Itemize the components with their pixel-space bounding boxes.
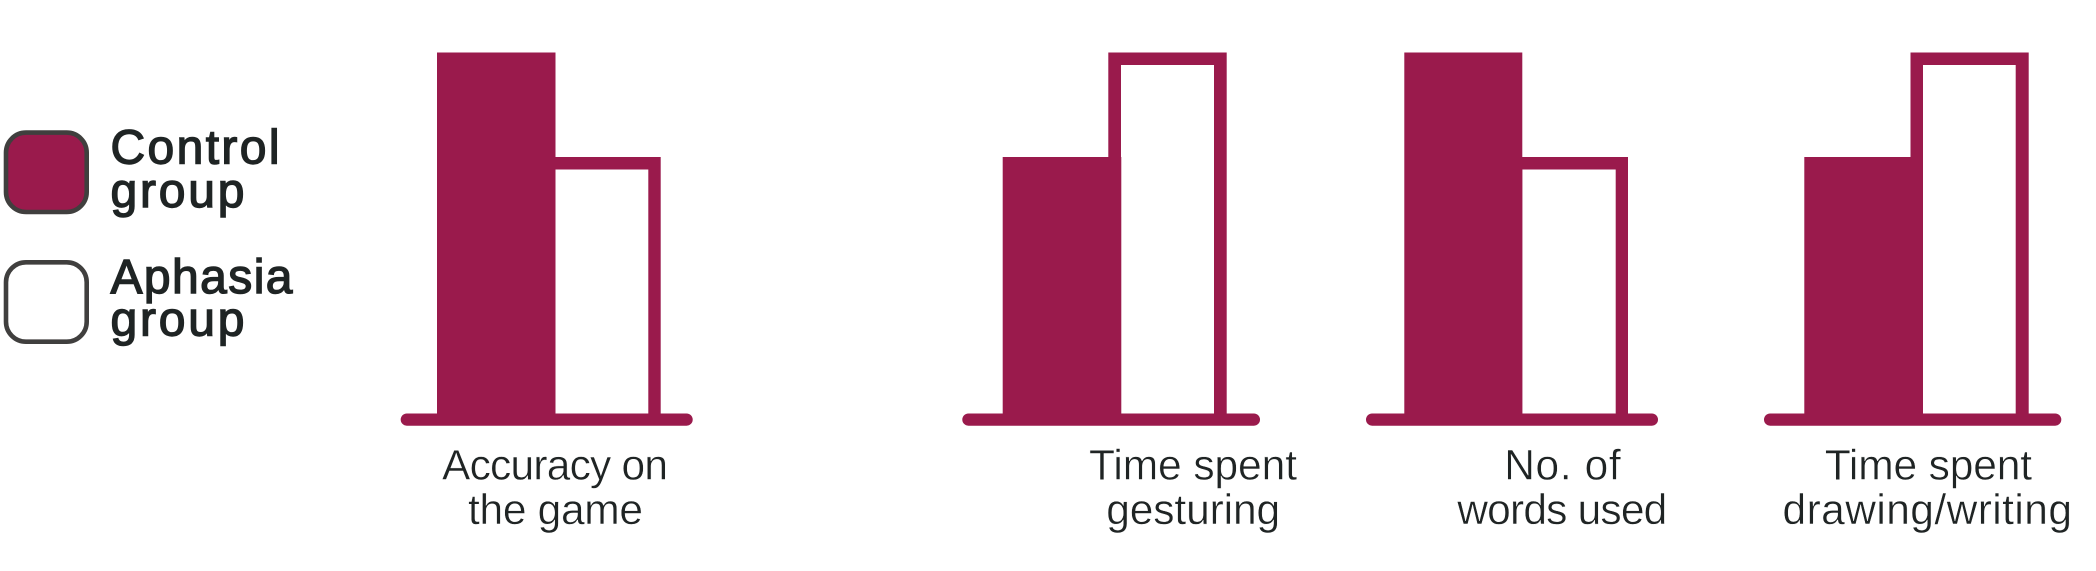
- aphasia bar outline: [1910, 52, 2029, 418]
- chart: time spent gesturing: [962, 52, 1297, 534]
- label: Time spent: [1089, 442, 1297, 489]
- baseline: [1366, 414, 1658, 426]
- chart: time spent drawing/writing: [1764, 52, 2072, 534]
- baseline: [1764, 414, 2061, 426]
- label: words used: [1456, 487, 1667, 534]
- legend swatch: control group: [6, 133, 87, 212]
- chart: number of words used: [1366, 52, 1667, 534]
- label: the game: [468, 487, 643, 534]
- legend: [6, 122, 293, 346]
- control bar: [1804, 157, 1923, 417]
- label: No. of: [1504, 442, 1621, 489]
- label: Accuracy on: [442, 442, 668, 489]
- label: gesturing: [1106, 487, 1280, 534]
- control bar: [437, 52, 556, 418]
- legend label: control group: Control: [110, 122, 280, 174]
- chart: accuracy on the game: [401, 52, 693, 534]
- baseline: [401, 414, 693, 426]
- control bar: [1404, 52, 1522, 418]
- baseline: [962, 414, 1260, 426]
- control bar: [1003, 157, 1121, 417]
- legend swatch: aphasia group: [6, 262, 87, 342]
- label: Time spent: [1825, 442, 2032, 489]
- label: drawing/writing: [1782, 487, 2072, 534]
- aphasia bar outline: [1108, 52, 1227, 418]
- legend label: aphasia group: Aphasia: [110, 251, 293, 304]
- aphasia bar outline: [543, 157, 661, 419]
- aphasia bar outline: [1510, 157, 1628, 419]
- legend label: aphasia group: group: [110, 294, 244, 346]
- legend label: control group: group: [110, 165, 244, 218]
